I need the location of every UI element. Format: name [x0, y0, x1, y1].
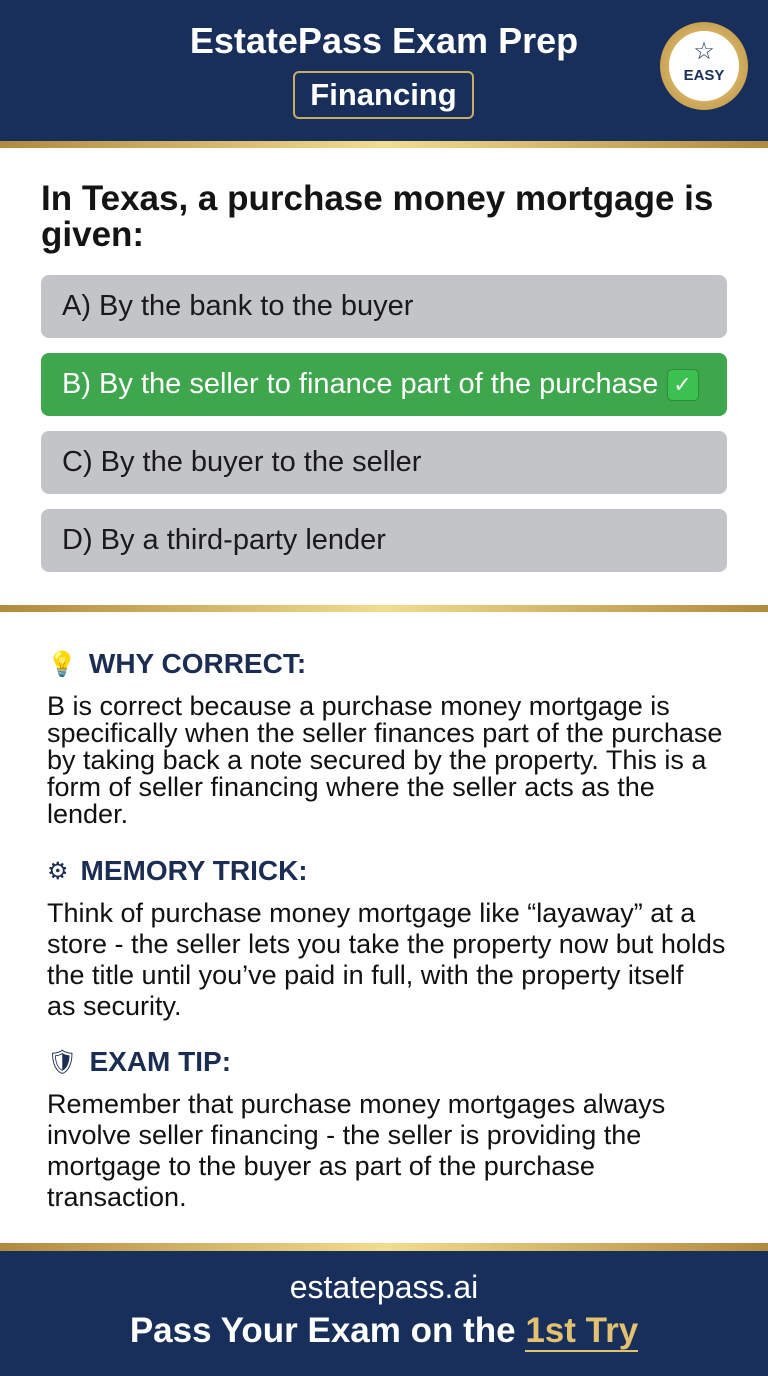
question: given: — [41, 215, 144, 254]
difficulty seal: EASY — [684, 67, 724, 84]
option D: D) By a third-party lender — [62, 524, 386, 556]
memory trick heading: ⚙ — [47, 858, 69, 884]
option B correct: ✓ — [673, 372, 692, 397]
memory trick heading: MEMORY TRICK: — [81, 855, 308, 886]
why correct heading: 💡 — [47, 650, 77, 678]
exam tip heading: 🛡 — [47, 1048, 77, 1076]
question: In Texas, a purchase money mortgage is — [41, 179, 713, 218]
header band — [0, 0, 768, 142]
why correct heading: WHY CORRECT: — [89, 648, 306, 679]
option C: C) By the buyer to the seller — [62, 446, 421, 478]
why correct text: specifically when the seller finances part of the purchase — [47, 718, 722, 748]
option A: A) By the bank to the buyer — [62, 290, 413, 322]
option B correct: B) By the seller to finance part of the purchase — [62, 368, 658, 400]
memory trick text: store - the seller lets you take the property now but holds — [47, 929, 725, 959]
option D — [41, 509, 727, 572]
category badge: Financing — [310, 77, 457, 112]
exam tip text: mortgage to the buyer as part of the purchase — [47, 1151, 595, 1181]
footer tagline: Pass Your Exam on the 1st Try — [130, 1311, 638, 1350]
option C — [41, 431, 727, 494]
title: EstatePass Exam Prep — [190, 20, 578, 61]
exam tip text: transaction. — [47, 1182, 187, 1212]
memory trick text: as security. — [47, 991, 182, 1021]
difficulty seal: ☆ — [693, 38, 715, 65]
memory trick text: Think of purchase money mortgage like “layaway” at a — [47, 898, 695, 928]
footer url: estatepass.ai — [290, 1269, 478, 1305]
footer — [0, 1251, 768, 1376]
why correct text: lender. — [47, 799, 128, 829]
why correct text: by taking back a note secured by the property. This is a — [47, 745, 706, 775]
category badge — [293, 71, 474, 119]
difficulty seal — [660, 22, 748, 110]
why correct text: B is correct because a purchase money mortgage is — [47, 691, 670, 721]
memory trick text: the title until you’ve paid in full, with the property itself — [47, 960, 683, 990]
option B correct — [41, 353, 727, 416]
memory trick text — [47, 898, 725, 1021]
why correct text — [47, 691, 722, 829]
exam tip text — [47, 1089, 665, 1212]
exam tip text: Remember that purchase money mortgages always — [47, 1089, 665, 1119]
question — [41, 179, 713, 254]
exam tip heading: EXAM TIP: — [89, 1046, 231, 1077]
why correct text: form of seller financing where the seller acts as the — [47, 772, 655, 802]
exam tip text: involve seller financing - the seller is providing the — [47, 1120, 641, 1150]
option A — [41, 275, 727, 338]
